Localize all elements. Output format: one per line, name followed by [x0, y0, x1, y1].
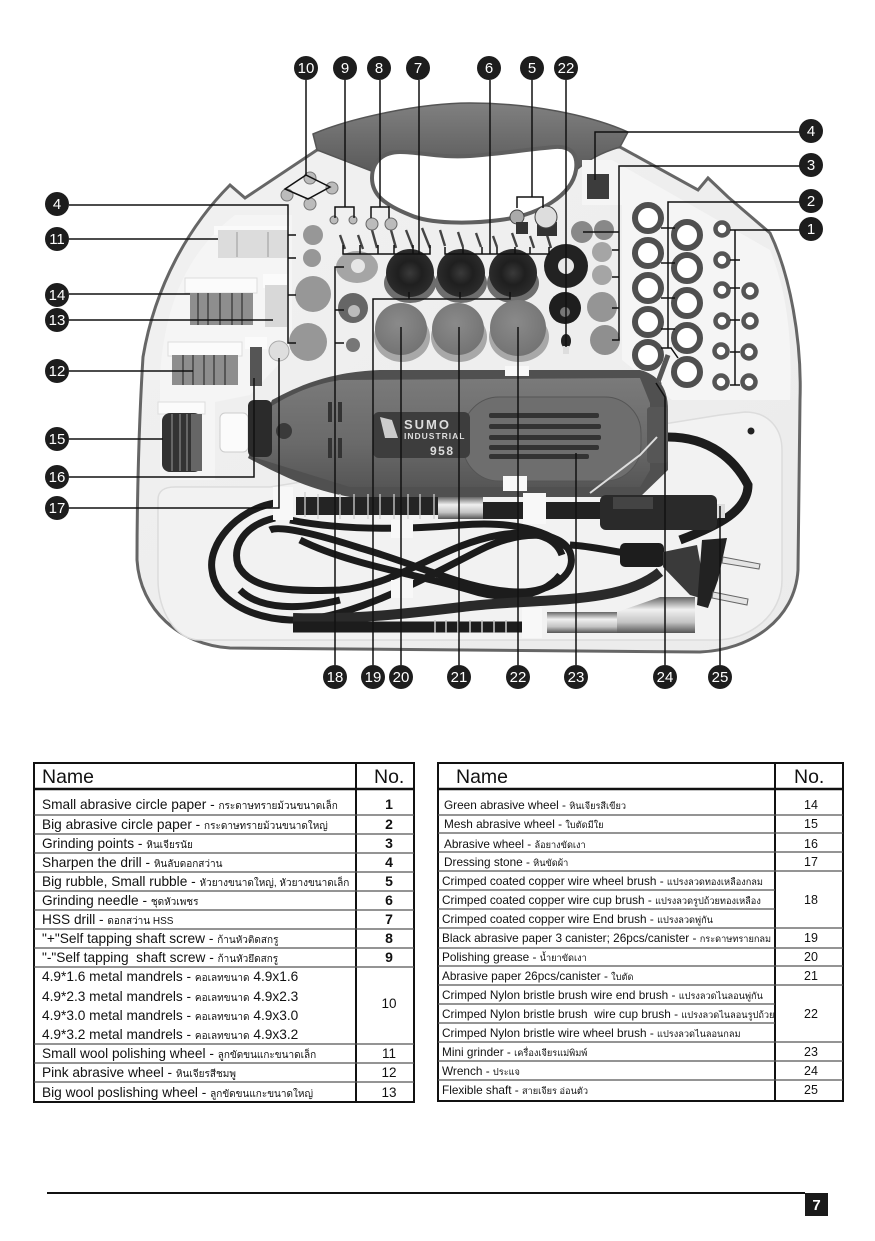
right table rows: 15 [804, 817, 818, 831]
rear block [647, 407, 668, 463]
right table rows: Abrasive paper 26pcs/canister - ใบตัด [442, 969, 633, 983]
black abrasive paper canisters [384, 249, 539, 303]
left table rows: Big wool poslishing wheel - ลูกขัดขนแกะขนาดใหญ่ [42, 1085, 313, 1100]
right table header [456, 766, 824, 788]
number callouts: 15 [49, 431, 65, 448]
right table rows: Dressing stone - หินขัดผ้า [444, 855, 568, 869]
left table rows: Pink abrasive wheel - หินเจียรสีชมพู [42, 1065, 236, 1080]
left table rows: 7 [385, 911, 393, 927]
left table rows: 8 [385, 930, 393, 946]
left table rows: Small abrasive circle paper - กระดาษทรายม้วนขนาดเล็ก [42, 797, 338, 812]
left table rows: 4.9*3.2 metal mandrels - คอเลทขนาด 4.9x3.2 [42, 1027, 298, 1042]
left table rows: 6 [385, 892, 393, 908]
right table rows: Crimped Nylon bristle brush wire cup brush - แปรงลวดไนลอนรูปถ้วย [442, 1007, 774, 1021]
logo plate: 958 [430, 444, 455, 458]
left table rows: Small wool polishing wheel - ลูกขัดขนแกะขนาดเล็ก [42, 1046, 316, 1061]
number callouts: 16 [49, 469, 65, 486]
wrench [653, 355, 668, 388]
number callouts: 17 [49, 500, 65, 517]
number callouts: 22 [510, 669, 526, 686]
number callouts: 22 [558, 60, 574, 77]
left table rows: Grinding points - หินเจียรนัย [42, 836, 193, 851]
right table rows: 19 [804, 931, 818, 945]
right table rows: Black abrasive paper 3 canister; 26pcs/canister - กระดาษทรายกลม [442, 931, 771, 945]
right table rows: 14 [804, 798, 818, 812]
number callouts: 5 [528, 60, 536, 77]
right table rows: Flexible shaft - สายเจียร อ่อนตัว [442, 1083, 588, 1097]
right table header: Name [456, 766, 508, 788]
number callouts: 8 [375, 60, 383, 77]
power cables [212, 437, 748, 627]
left table rows: 3 [385, 835, 393, 851]
grinder body [253, 378, 650, 487]
left table header: No. [374, 766, 404, 788]
handle opening [372, 147, 576, 223]
white tray highlights [160, 215, 292, 480]
left table rows: 2 [385, 816, 393, 832]
grip [483, 502, 603, 519]
dressing stone [269, 341, 289, 361]
right table rows: Crimped Nylon bristle wire wheel brush - แปรงลวดไนลอนกลม [442, 1026, 741, 1040]
right table rows: 17 [804, 855, 818, 869]
nose collar [220, 413, 248, 452]
abrasive paper small rolls [714, 222, 756, 388]
number callouts [45, 56, 823, 689]
small wool polishing wheel [214, 226, 290, 258]
number callouts: 24 [657, 669, 673, 686]
number callouts: 10 [298, 60, 314, 77]
lower tray recess [158, 412, 782, 640]
right table rows: 22 [804, 1007, 818, 1021]
right table header: No. [794, 766, 824, 788]
number callouts: 9 [341, 60, 349, 77]
left table header: Name [42, 766, 94, 788]
number callouts: 4 [53, 196, 61, 213]
drill bits and screw shafts row [330, 216, 551, 249]
right table rows: Abrasive wheel - ล้อยางขัดเงา [444, 837, 586, 851]
sharpening stones [289, 225, 331, 361]
right table rows [442, 798, 818, 1097]
sharpen stone square [587, 174, 609, 199]
mini grinder [220, 370, 668, 497]
right table rows: 20 [804, 950, 818, 964]
right table rows: Mesh abrasive wheel - ใบตัดมีใย [444, 817, 604, 831]
left table rows: Sharpen the drill - หินลับดอกสว่าน [42, 855, 223, 870]
right table rows: 21 [804, 969, 818, 983]
number callouts: 14 [49, 287, 65, 304]
green abrasive wheel set [185, 278, 257, 325]
left table rows: 4.9*2.3 metal mandrels - คอเลทขนาด 4.9x2.3 [42, 989, 299, 1004]
number callouts: 1 [807, 221, 815, 238]
left parts table [34, 763, 414, 1102]
handle [313, 103, 628, 172]
left table rows: 4.9*3.0 metal mandrels - คอเลทขนาด 4.9x3.0 [42, 1008, 299, 1023]
grinding points [571, 174, 620, 355]
page number [805, 1193, 828, 1216]
rubble tips [510, 206, 557, 236]
left table rows: "-"Self tapping shaft screw - ก้านหัวยึดสกรู [42, 950, 279, 965]
number callouts: 11 [49, 231, 65, 248]
big wool wheel [263, 274, 289, 327]
handpiece [600, 495, 717, 530]
vents front [330, 402, 340, 458]
ferrule [617, 597, 695, 633]
left table rows: Big rubble, Small rubble - หัวยางขนาดใหญ่, หัวยางขนาดเล็ก [42, 874, 349, 889]
grinder recess [248, 370, 668, 497]
page footer [47, 1193, 828, 1216]
number callouts: 2 [807, 193, 815, 210]
right table rows: Mini grinder - เครื่องเจียรแม่พิมพ์ [442, 1045, 587, 1059]
left table header [42, 766, 404, 788]
vents rear [489, 413, 601, 459]
mesh abrasive wheels [158, 402, 205, 472]
pink abrasive wheel set [168, 342, 242, 385]
abrasive paper big rolls [635, 205, 700, 385]
number callouts: 25 [712, 669, 728, 686]
number callouts: 18 [327, 669, 343, 686]
nylon brushes [544, 244, 588, 354]
clips [273, 366, 542, 638]
number callouts: 6 [485, 60, 493, 77]
right table rows: 18 [804, 893, 818, 907]
left table rows: "+"Self tapping shaft screw - ก้านหัวติดสกรู [42, 931, 279, 946]
right table rows: Crimped coated copper wire wheel brush - แปรงลวดทองเหลืองกลม [442, 874, 763, 888]
right table rows: Crimped Nylon bristle brush wire end brush - แปรงลวดไนลอนพู่กัน [442, 988, 764, 1002]
left table rows: HSS drill - ดอกสว่าน HSS [42, 912, 174, 927]
small hole [748, 428, 754, 434]
left table rows: Grinding needle - ชุดหัวเพชร [42, 893, 199, 908]
left table rows: 12 [381, 1065, 397, 1080]
grinder panel [463, 397, 641, 481]
right table rows: 25 [804, 1083, 818, 1097]
number callouts: 23 [568, 669, 584, 686]
canisters 20 21 22 [374, 300, 549, 362]
left table rows: 11 [382, 1046, 396, 1061]
right table rows: Green abrasive wheel - หินเจียรสีเขียว [444, 798, 626, 812]
left table rows: 1 [385, 796, 393, 812]
left table rows: 9 [385, 949, 393, 965]
wire clip [590, 437, 657, 493]
right table rows: 23 [804, 1045, 818, 1059]
left table rows: 10 [381, 996, 397, 1011]
flexible shaft [273, 366, 725, 638]
right table rows: Polishing grease - น้ำยาขัดเงา [442, 950, 587, 964]
right table rows: Wrench - ประแจ [442, 1064, 520, 1078]
logo plate: INDUSTRIAL [404, 431, 465, 441]
left table rows: 5 [385, 873, 393, 889]
brass wire brushes [336, 251, 378, 352]
tool case [137, 103, 800, 652]
lower coil [547, 612, 617, 633]
power plug [620, 538, 760, 608]
right parts table [438, 763, 843, 1101]
wool and abrasive wheels left side [158, 225, 331, 472]
page number: 7 [812, 1197, 821, 1214]
logo plate [373, 412, 470, 458]
mandrels set [281, 172, 338, 210]
leader lines [69, 80, 800, 665]
spring shaft [296, 497, 438, 515]
number callouts: 7 [414, 60, 422, 77]
left table rows [42, 796, 397, 1100]
number callouts: 4 [807, 123, 815, 140]
number callouts: 19 [365, 669, 381, 686]
number callouts: 13 [49, 312, 65, 329]
right table rows: Crimped coated copper wire cup brush - แปรงลวดรูปถ้วยทองเหลือง [442, 893, 761, 907]
collet ring [248, 400, 272, 457]
right table rows: Crimped coated copper wire End brush - แปรงลวดพู่กัน [442, 912, 714, 926]
number callouts: 3 [807, 157, 815, 174]
number callouts: 12 [49, 363, 65, 380]
number callouts: 20 [393, 669, 409, 686]
left table rows: 4.9*1.6 metal mandrels - คอเลทขนาด 4.9x1.6 [42, 969, 299, 984]
side button [276, 423, 292, 439]
abrasive wheel 16 [245, 337, 267, 386]
metal coil [438, 497, 483, 519]
logo plate: SUMO [404, 417, 451, 432]
case body [137, 147, 800, 652]
number callouts: 21 [451, 669, 467, 686]
left table rows: Big abrasive circle paper - กระดาษทรายม้วนขนาดใหญ่ [42, 817, 328, 832]
left table rows: 4 [385, 854, 393, 870]
right table rows: 16 [804, 837, 818, 851]
right table rows: 24 [804, 1064, 818, 1078]
left table rows: 13 [381, 1085, 397, 1100]
